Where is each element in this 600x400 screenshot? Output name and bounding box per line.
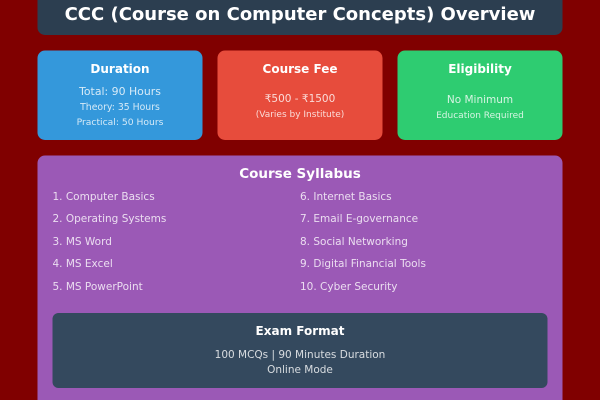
exam heading: Exam Format	[256, 324, 345, 338]
panel: course fee	[218, 50, 382, 140]
duration total: Total: 90 Hours	[78, 85, 161, 98]
exam mode: Online Mode	[267, 364, 333, 376]
syllabus heading: Course Syllabus	[239, 166, 361, 182]
duration theory: Theory: 35 Hours	[79, 102, 160, 113]
syllabus right column	[300, 191, 426, 293]
syllabus right column: 7. Email E-governance	[300, 213, 418, 225]
duration practical: Practical: 50 Hours	[77, 117, 164, 128]
syllabus right column: 10. Cyber Security	[300, 281, 397, 293]
syllabus left column: 2. Operating Systems	[52, 213, 166, 225]
syllabus left column: 5. MS PowerPoint	[52, 281, 143, 293]
panel: eligibility	[398, 50, 562, 140]
syllabus left column: 1. Computer Basics	[52, 191, 155, 203]
syllabus left column: 4. MS Excel	[52, 258, 113, 270]
duration heading: Duration	[90, 62, 150, 76]
panel: exam format	[52, 313, 548, 388]
eligibility line one: No Minimum	[447, 94, 513, 106]
fee range: ₹500 - ₹1500	[265, 93, 335, 105]
panel: course syllabus	[38, 156, 562, 400]
panel: duration	[38, 50, 202, 140]
title banner	[38, 0, 562, 35]
exam details: 100 MCQs | 90 Minutes Duration	[215, 349, 385, 361]
title: CCC (Course on Computer Concepts) Overview	[65, 4, 535, 25]
course fee heading: Course Fee	[263, 62, 337, 76]
syllabus left column: 3. MS Word	[52, 236, 112, 248]
eligibility heading: Eligibility	[448, 62, 512, 76]
syllabus left column	[52, 191, 166, 293]
eligibility line two: Education Required	[436, 111, 524, 121]
syllabus right column: 9. Digital Financial Tools	[300, 258, 426, 270]
syllabus right column: 6. Internet Basics	[300, 191, 392, 203]
fee note: (Varies by Institute)	[256, 110, 344, 120]
syllabus right column: 8. Social Networking	[300, 236, 408, 248]
